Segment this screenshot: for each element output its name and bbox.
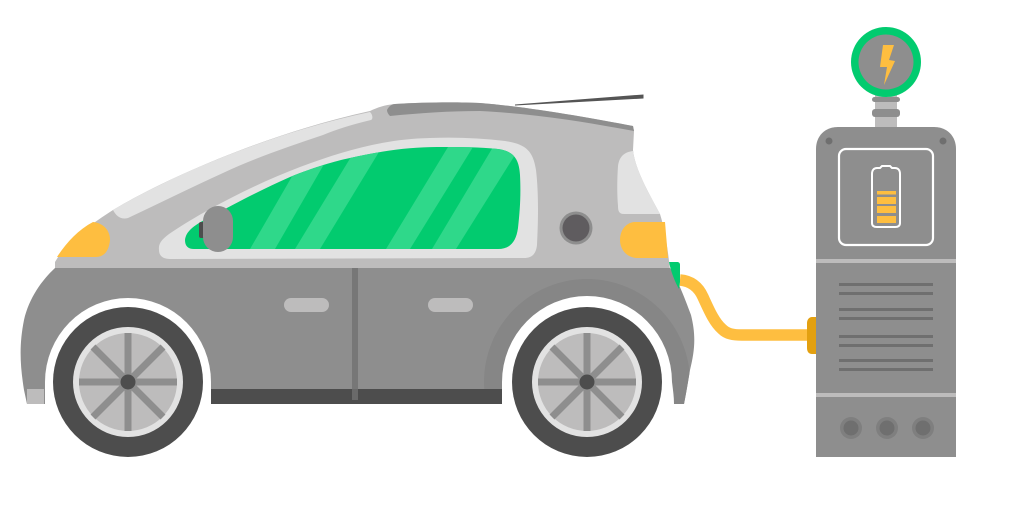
roof trim [387,102,634,131]
vent slots [839,283,933,371]
icon: battery [872,166,900,227]
window surround [159,138,538,259]
cabinet bands [816,259,956,397]
screen frame [839,149,933,245]
door seam [352,268,358,400]
charge port plug [669,262,680,289]
car upper body [55,102,670,270]
glass stripes [250,147,520,249]
icon: lightning bolt [880,45,895,85]
tail light [620,222,668,258]
door handle rear [428,298,473,312]
cable connector [807,317,816,354]
screws [826,138,946,144]
illustration: electric car at charging station [20,27,956,457]
rear fender arch shade [484,280,690,404]
control buttons [840,417,934,439]
station gauge [851,27,921,97]
charging station [816,27,956,457]
car lower body [20,268,694,404]
front bumper corner [27,389,44,404]
antenna [515,95,643,105]
charging cable [680,280,810,335]
window glass with reflections [185,147,520,249]
rear wheel [512,307,662,457]
door seam lower [352,389,358,400]
wheel arches [45,296,674,410]
rear quarter window [617,151,660,214]
station neck [872,95,900,129]
front wheel [53,307,203,457]
headlight [57,222,110,257]
station cabinet [816,127,956,457]
fuel cap [560,212,592,244]
side mirror [199,206,233,252]
side sill [211,389,502,404]
door handle front [284,298,329,312]
hood highlight strip [113,112,372,219]
